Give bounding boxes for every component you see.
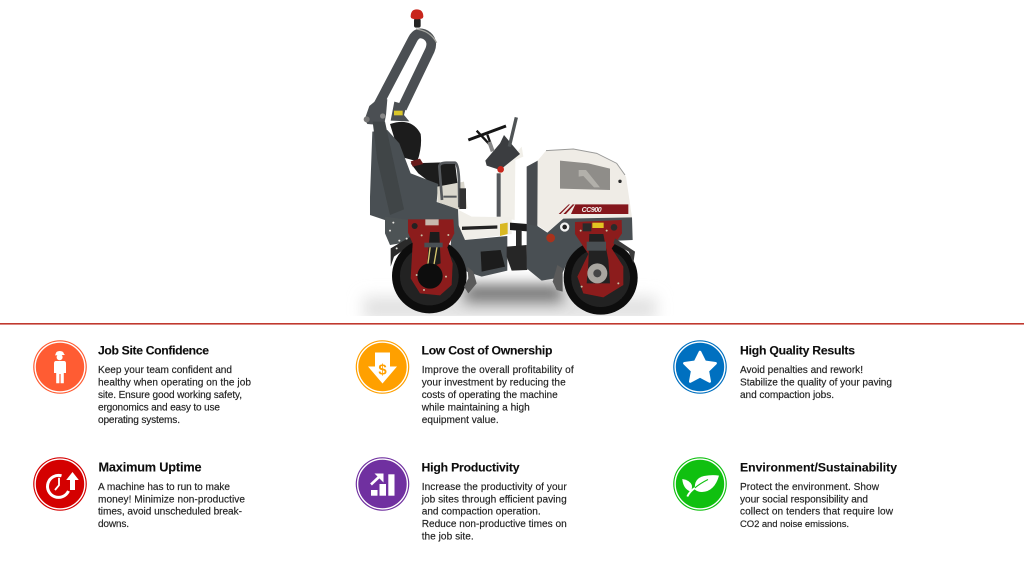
- text block: Keep your team confident and: [98, 365, 232, 376]
- text block: Increase the productivity of your: [422, 482, 567, 493]
- text block: equipment value.: [422, 415, 499, 426]
- roll-over bar: [364, 29, 437, 125]
- heading: High Productivity: [422, 460, 520, 474]
- text block: [421, 482, 567, 542]
- text block: the job site.: [422, 532, 474, 542]
- seat body housing: [370, 130, 459, 240]
- operator deck: [459, 210, 512, 240]
- icon: star: [673, 340, 727, 394]
- center chassis: [450, 213, 527, 277]
- text block: downs.: [98, 519, 129, 530]
- heading: Maximum Uptime: [98, 460, 202, 474]
- text block: your investment by reducing the: [422, 378, 566, 389]
- text block: while maintaining a high: [421, 402, 530, 414]
- rear side panel: [385, 217, 415, 267]
- text block: [98, 482, 245, 530]
- hood window: [560, 161, 622, 190]
- rear scraper: [464, 267, 477, 293]
- engine side panel: [527, 159, 540, 227]
- CC900 stripe: [559, 204, 628, 214]
- icon: worker: [33, 340, 87, 394]
- text block: times, avoid unscheduled break-: [98, 506, 242, 518]
- divider line: [0, 323, 1024, 325]
- front body: [527, 217, 633, 281]
- panel: Low Cost of Ownership: [356, 340, 574, 426]
- icon: clock with arrow: [33, 457, 87, 511]
- text block: Protect the environment. Show: [740, 482, 880, 493]
- text block: [421, 365, 574, 426]
- panel: Job Site Confidence: [33, 340, 251, 426]
- hood top trim: [546, 149, 625, 175]
- text block: money! Minimize non-productive: [98, 494, 245, 506]
- text block: Reduce non-productive times on: [422, 519, 567, 530]
- text block: CO2 and noise emissions.: [740, 519, 849, 530]
- body badges: [546, 222, 569, 242]
- seat base and handrail: [437, 163, 467, 209]
- front drum: [564, 241, 638, 315]
- text block: your social responsibility and: [740, 494, 868, 506]
- heading: Low Cost of Ownership: [422, 344, 552, 358]
- heading: Environment/Sustainability: [740, 460, 897, 474]
- text block: and compaction jobs.: [740, 390, 834, 401]
- beacon light: [411, 9, 423, 28]
- text block: costs of operating the machine: [422, 390, 558, 401]
- rear drum: [392, 239, 467, 313]
- text block: [740, 482, 894, 530]
- text block: [740, 365, 892, 401]
- CC900 stripe: CC900: [582, 207, 602, 214]
- front scrapers: [553, 238, 635, 292]
- heading: Job Site Confidence: [98, 344, 209, 358]
- engine hood: [537, 149, 632, 232]
- text block: operating systems.: [98, 415, 180, 426]
- panel: Environment/Sustainability: [673, 457, 897, 530]
- rear drum plate: [408, 219, 454, 295]
- rear post: [373, 122, 404, 215]
- ground shadow: [363, 285, 657, 320]
- icon: leaf: [673, 457, 727, 511]
- text block: [98, 365, 251, 426]
- icon: down arrow with dollar: [356, 340, 409, 394]
- text block: ergonomics and easy to use: [98, 402, 220, 414]
- front drum plate: [575, 220, 623, 297]
- text block: A machine has to run to make: [98, 482, 230, 493]
- text block: job sites through efficient paving: [421, 494, 567, 506]
- heading: High Quality Results: [740, 344, 855, 358]
- panel: High Quality Results: [673, 340, 892, 401]
- panel: Maximum Uptime: [33, 457, 245, 530]
- panel: High Productivity: [356, 457, 567, 542]
- operator seat: [390, 122, 458, 188]
- text block: site. Ensure good working safety,: [98, 390, 242, 401]
- icon: down arrow with dollar: $: [378, 362, 387, 378]
- steering column: [468, 117, 523, 220]
- text block: and compaction operation.: [422, 506, 541, 518]
- text block: Avoid penalties and rework!: [740, 365, 863, 376]
- text block: Stabilize the quality of your paving: [740, 378, 892, 389]
- roller machine illustration: [363, 9, 657, 320]
- text block: collect on tenders that require low: [740, 506, 894, 518]
- text block: healthy when operating on the job: [98, 378, 251, 389]
- icon: rising bars: [356, 457, 409, 511]
- text block: Improve the overall profitability of: [422, 365, 574, 376]
